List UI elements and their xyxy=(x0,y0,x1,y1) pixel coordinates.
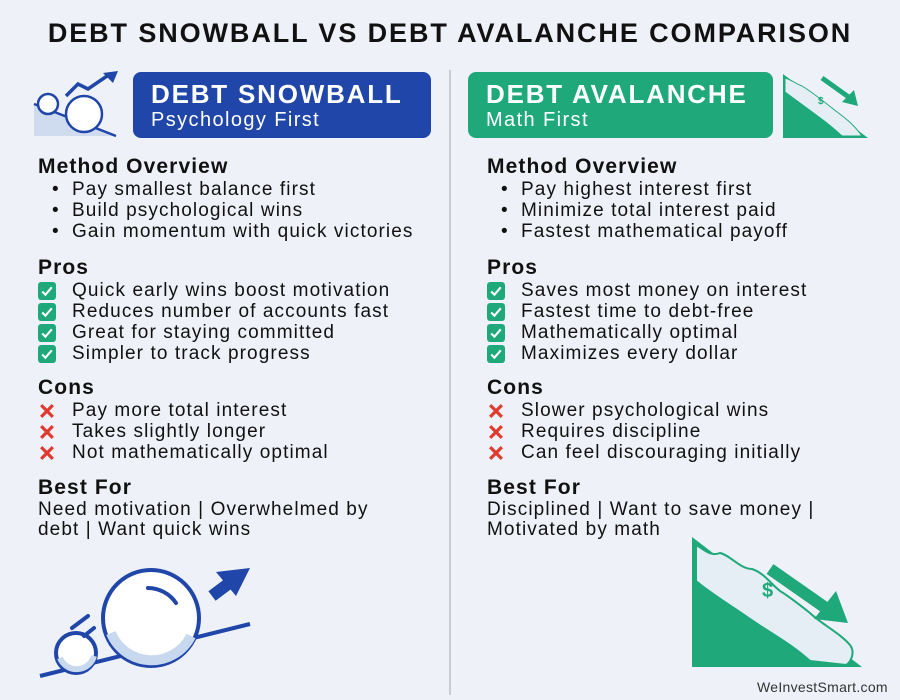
list: method xyxy=(52,179,414,242)
list: method: Pay highest interest first xyxy=(521,179,752,200)
list: pros: Saves most money on interest xyxy=(521,280,807,301)
list: pros: Reduces number of accounts fast xyxy=(72,301,389,322)
illustration: avalanche: $ xyxy=(762,580,773,602)
icon: avalanche header: $ xyxy=(818,96,824,107)
illustration: snowball rolling uphill xyxy=(40,568,250,678)
text: best for xyxy=(487,499,814,540)
list: cons xyxy=(40,400,329,463)
icon: avalanche header xyxy=(783,74,868,138)
illustration: avalanche xyxy=(692,537,862,667)
header: debt avalanche xyxy=(468,72,773,138)
list: method: Minimize total interest paid xyxy=(521,200,777,221)
list: cons xyxy=(489,400,801,463)
list: pros: Mathematically optimal xyxy=(521,322,738,343)
text: best for: Motivated by math xyxy=(487,519,661,540)
list: method: Fastest mathematical payoff xyxy=(521,221,788,242)
text: best for: Disciplined | Want to save money | xyxy=(487,499,814,520)
heading: cons: Cons xyxy=(38,376,95,399)
list: pros: Simpler to track progress xyxy=(72,343,311,364)
text: best for xyxy=(38,499,369,540)
heading: pros: Pros xyxy=(487,256,538,279)
list: cons: Takes slightly longer xyxy=(72,421,266,442)
text: best for: debt | Want quick wins xyxy=(38,519,251,540)
list: method: Pay smallest balance first xyxy=(72,179,316,200)
heading: pros: Pros xyxy=(38,256,89,279)
list: cons: Pay more total interest xyxy=(72,400,287,421)
list: method: Build psychological wins xyxy=(72,200,303,221)
header: debt snowball: DEBT SNOWBALL xyxy=(151,79,403,109)
panel: snowball content xyxy=(38,155,414,540)
text: best for: Need motivation | Overwhelmed by xyxy=(38,499,369,520)
list: cons: Requires discipline xyxy=(521,421,701,442)
list: pros: Fastest time to debt-free xyxy=(521,301,754,322)
list: cons: Not mathematically optimal xyxy=(72,442,329,463)
heading: cons: Cons xyxy=(487,376,544,399)
icon: snowball header xyxy=(34,71,118,138)
heading: method overview: Method Overview xyxy=(487,155,677,178)
title: DEBT SNOWBALL VS DEBT AVALANCHE COMPARISON xyxy=(48,18,852,48)
heading: method overview: Method Overview xyxy=(38,155,228,178)
header: debt avalanche: DEBT AVALANCHE xyxy=(486,79,748,109)
header: debt snowball xyxy=(133,72,431,138)
list: pros xyxy=(38,280,390,364)
list: cons: Slower psychological wins xyxy=(521,400,769,421)
list: pros: Quick early wins boost motivation xyxy=(72,280,390,301)
list: pros: Great for staying committed xyxy=(72,322,335,343)
list: method xyxy=(502,179,788,242)
list: cons: Can feel discouraging initially xyxy=(521,442,801,463)
header: debt avalanche: Math First xyxy=(486,109,589,131)
list: pros: Maximizes every dollar xyxy=(521,343,738,364)
heading: best for: Best For xyxy=(38,476,132,499)
list: method: Gain momentum with quick victories xyxy=(72,221,414,242)
list: pros xyxy=(487,280,807,364)
footer: source: WeInvestSmart.com xyxy=(757,679,888,695)
panel: avalanche content xyxy=(487,155,814,540)
heading: best for: Best For xyxy=(487,476,581,499)
header: debt snowball: Psychology First xyxy=(151,109,320,131)
